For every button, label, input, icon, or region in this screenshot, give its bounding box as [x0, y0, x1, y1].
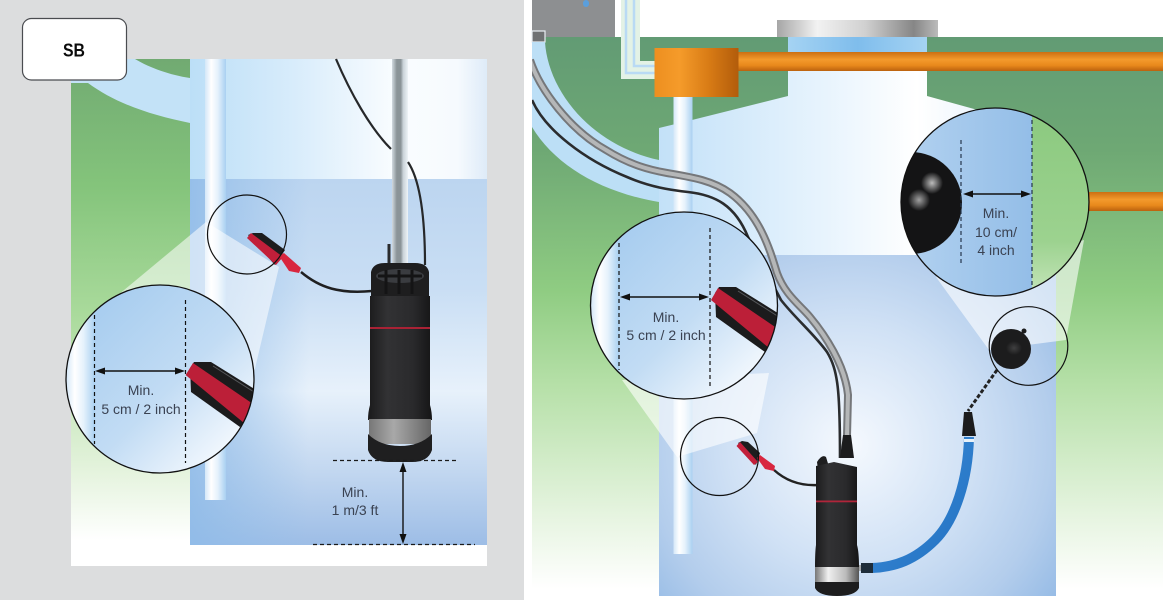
label: Min. 1 m/3 ft: 1 m/3 ft	[332, 502, 378, 518]
float connector	[962, 412, 976, 436]
pump	[815, 435, 859, 596]
lens outline	[590, 212, 778, 399]
label: Min. 5 cm / 2 inch: Min.	[128, 382, 154, 398]
enlarged sensor	[186, 362, 256, 427]
label: Min. 10 cm / 4 inch: 4 inch	[977, 242, 1015, 258]
support rod	[392, 59, 408, 265]
small sensor	[247, 233, 301, 273]
dashed guide left	[618, 243, 620, 370]
arrow: 10 cm	[963, 190, 1031, 198]
vertical pipe	[205, 59, 226, 500]
sky	[524, 0, 1163, 600]
SB tag	[22, 18, 126, 80]
float chain	[968, 370, 997, 411]
sensor cable	[301, 272, 372, 292]
arrow: 1 m distance	[400, 462, 406, 544]
lens outline	[901, 108, 1089, 296]
lens content	[902, 116, 1088, 288]
orange side pipe	[1085, 192, 1163, 211]
panel: SB installation scene	[71, 59, 487, 566]
lens background	[590, 212, 778, 399]
orange main pipe	[736, 52, 1163, 71]
magnifier beam	[100, 222, 279, 377]
pump body	[368, 296, 432, 420]
water edge shading	[190, 179, 487, 545]
soil	[532, 37, 1163, 600]
neck water band	[788, 37, 927, 53]
tank body	[659, 37, 1056, 596]
arrow: 5 cm	[95, 368, 185, 374]
black cable	[532, 100, 840, 458]
power cable	[336, 59, 425, 265]
dashed guide right	[709, 228, 711, 388]
inspection circle: float	[989, 307, 1068, 385]
lens content	[591, 241, 776, 372]
sensor cable	[774, 470, 818, 485]
dashed guide right	[1031, 120, 1033, 285]
dashed line: tank floor	[313, 544, 475, 546]
small sensor	[736, 441, 775, 471]
magnifier beams	[622, 240, 1084, 457]
inspection circle: sensor	[680, 418, 758, 496]
tank air space	[190, 59, 487, 179]
panel: left background	[0, 0, 524, 600]
steel ring	[815, 567, 859, 582]
label: Min. 1 m/3 ft: Min.	[342, 484, 368, 500]
steel ring	[369, 419, 431, 444]
dashed guide left	[960, 140, 962, 264]
magnifier: 10 cm clearance	[900, 107, 1090, 297]
enlarged float ball	[902, 152, 962, 254]
lens background	[66, 285, 254, 473]
antenna	[388, 244, 390, 264]
pump base	[815, 582, 859, 596]
enlarged sensor	[711, 287, 781, 352]
dashed line: pump bottom	[333, 460, 458, 462]
orange junction box	[654, 48, 738, 97]
label: Min. 5 cm / 2 inch: 5 cm / 2 inch	[101, 401, 181, 417]
gray box	[532, 0, 615, 37]
dashed guide left	[94, 315, 96, 444]
lens background	[901, 108, 1089, 296]
blue drop	[583, 0, 589, 7]
label: Min. 10 cm / 4 inch: 10 cm/	[975, 224, 1017, 240]
red band	[370, 327, 430, 329]
water	[190, 179, 487, 545]
upper pipe	[621, 0, 655, 79]
float ball	[991, 328, 1031, 369]
pump	[368, 244, 432, 462]
arrow: 5 cm	[620, 294, 709, 300]
braided hose	[530, 60, 848, 436]
label: Min. 5 cm / 2 inch: Min.	[653, 309, 679, 325]
handle	[817, 456, 830, 470]
pump base	[368, 434, 432, 462]
small connector box	[532, 31, 545, 42]
panel: right scene	[524, 0, 1163, 600]
label: Min. 10 cm / 4 inch: Min.	[983, 205, 1009, 221]
lens content	[66, 314, 253, 446]
magnifier: right 5 cm clearance	[590, 212, 781, 400]
pump body	[815, 462, 859, 567]
soil	[71, 59, 191, 566]
magnifier: left 5 cm clearance	[66, 285, 256, 473]
red band	[816, 500, 857, 502]
cage	[371, 263, 429, 300]
label: Min. 5 cm / 2 inch: 5 cm / 2 inch	[626, 327, 706, 343]
upper pipe inner	[626, 0, 655, 73]
tank water	[659, 255, 1056, 596]
top connector	[840, 435, 854, 458]
hose coupling	[854, 439, 974, 573]
float hose	[872, 437, 969, 568]
inlet pipe band	[71, 59, 190, 123]
SB tag: SB	[63, 40, 85, 60]
inlet pipe band	[532, 42, 659, 202]
lens outline	[66, 285, 254, 473]
white base	[190, 545, 487, 566]
dashed guide right	[184, 300, 186, 463]
small inspection circle	[208, 195, 286, 274]
manhole lid	[777, 20, 938, 37]
vertical pipe	[674, 97, 692, 554]
